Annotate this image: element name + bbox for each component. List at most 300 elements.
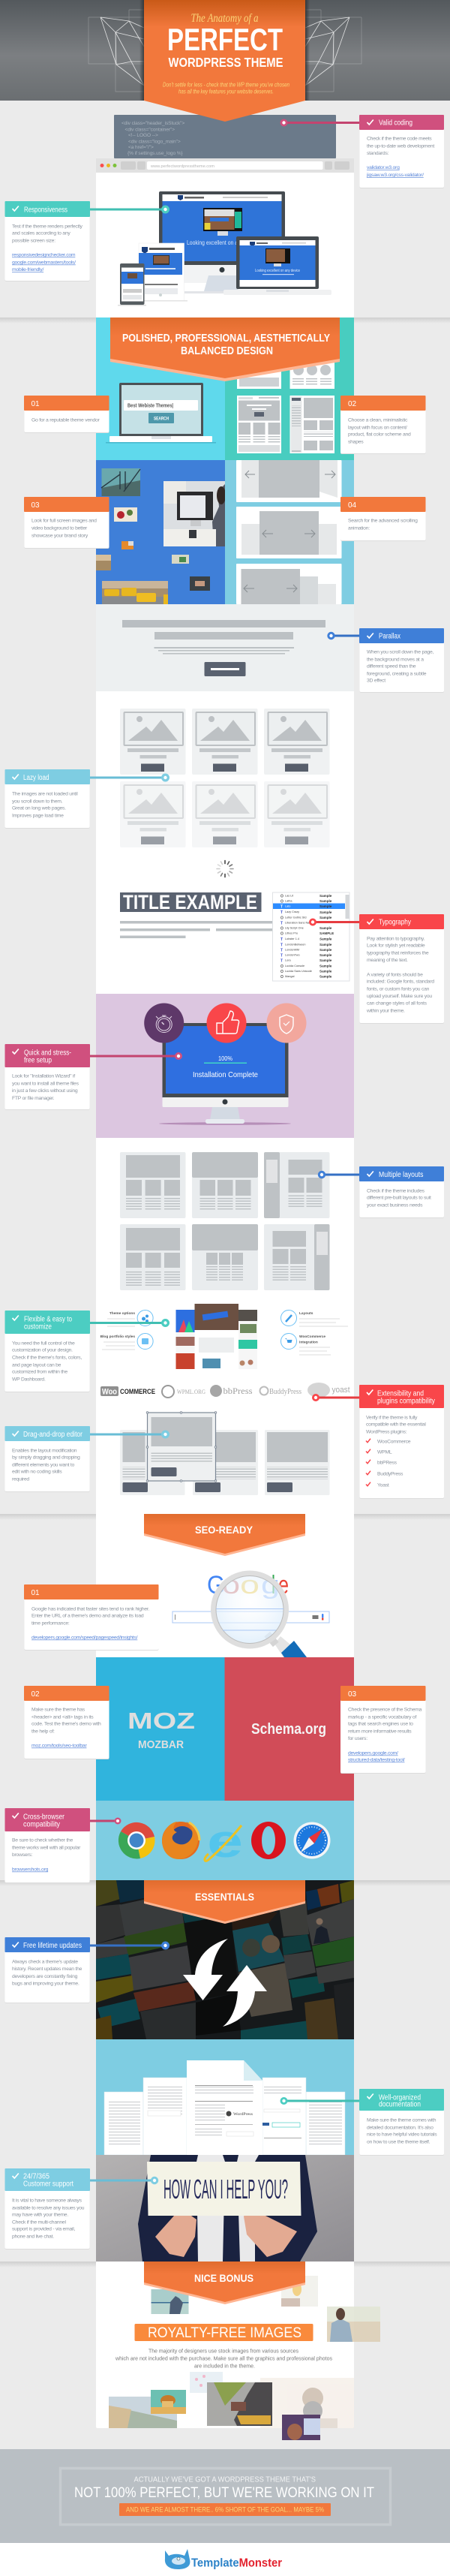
callout connector (318, 1171, 360, 1178)
callout text: A variety of fonts should be (367, 973, 423, 977)
callout header (4, 1044, 90, 1067)
laptop: Looking excellent on any device (255, 269, 300, 273)
title banner (144, 0, 305, 122)
callout header: Extensibility and (377, 1390, 424, 1398)
callout header: Well-organized (379, 2094, 421, 2102)
step card 03: 03 (32, 501, 40, 510)
callout header (359, 1166, 444, 1181)
photo: bridge (101, 468, 140, 496)
font picker list: O (280, 932, 284, 937)
wireframe card: right (265, 1430, 330, 1495)
font picker list: Liberation Sans Nar (285, 922, 310, 925)
font picker list: Latha (285, 899, 292, 902)
callout text: Verify if the theme is fully (366, 1416, 418, 1420)
icon: chrome (118, 1822, 155, 1858)
callout: typography (309, 914, 444, 1024)
seo step card 02: code. Test the theme's demo with (32, 1722, 101, 1726)
plugin checklist: WPML (377, 1450, 392, 1455)
step card 02: Choose a clean, minimalistic (348, 417, 408, 423)
font picker list: O (280, 899, 284, 904)
callout text (12, 224, 82, 272)
callout header (4, 2168, 90, 2191)
callout text: Check if the theme includes (367, 1189, 425, 1193)
photo: muffin (151, 2390, 186, 2414)
callout header (4, 769, 90, 784)
panel: documentation pages (96, 2039, 354, 2155)
callout header: Typography (379, 919, 411, 926)
step card 01: Go for a reputable theme vendor (32, 417, 100, 423)
callout header (4, 1808, 90, 1831)
callout: well-organized documentation (280, 2089, 444, 2156)
callout text: Check if the multi-channel (12, 2220, 66, 2225)
dragged card with handles (146, 1412, 217, 1482)
banner: essentials: ESSENTIALS (195, 1891, 254, 1903)
option: layouts: Layouts (299, 1311, 314, 1316)
option: woocommerce integration: WooCommerce (299, 1335, 326, 1339)
font picker list: LondonMM (285, 949, 299, 952)
font picker list: Lily Script One (285, 926, 304, 929)
panel: installation complete (96, 994, 354, 1138)
panel: code view: {% if settings.use_logo %} (128, 151, 184, 156)
option: blog portfolio styles: Blog portfolio styles (100, 1335, 135, 1339)
royalty-free heading: ROYALTY-FREE IMAGES (148, 2325, 302, 2341)
panel: mozbar: MOZ (128, 1708, 195, 1734)
seo step card 03: structured-data/testing-tool/ (348, 1758, 405, 1762)
seo step card 02: the help of: (32, 1729, 55, 1734)
help sign (147, 2162, 302, 2216)
panel: minimalist wireframes (225, 317, 354, 460)
callout: valid coding (280, 115, 444, 188)
callout connector (90, 1052, 182, 1060)
panel: vendor laptop search: Best Webiste Themes| (128, 404, 173, 408)
footer logo strip (0, 2543, 450, 2576)
footer line 1: ACTUALLY WE'VE GOT A WORDPRESS THEME THAT'S (134, 2475, 316, 2484)
icon: monster (165, 2549, 190, 2569)
callout text (12, 2198, 85, 2240)
callout header: Free lifetime updates (23, 1942, 82, 1950)
seo step card 01: time performance: (32, 1621, 70, 1626)
callout text (366, 137, 434, 178)
callout: flexible and easy to customize (4, 1311, 170, 1392)
seo step card 03 (340, 1686, 426, 1774)
option: woocommerce integration (280, 1333, 331, 1356)
step card 03: showcase your brand story (32, 533, 88, 539)
callout text: jigsaw.w3.org/css-validator/ (366, 173, 424, 178)
callout text: and page layout can be (12, 1363, 62, 1368)
callout text: phone and live chat. (12, 2234, 54, 2240)
callout text: theme works well with all popular (12, 1845, 81, 1851)
logo: wpml: WPML.ORG (177, 1388, 206, 1395)
callout text: Make sure the theme comes with (367, 2118, 436, 2123)
installation progress: 100% (218, 1055, 232, 1062)
callout header: Flexible & easy to (24, 1315, 72, 1324)
callout header: Quick and stress- (24, 1049, 71, 1057)
wireframe card: middle (193, 1430, 258, 1495)
photo: woman with laptop (282, 2415, 320, 2440)
magnifier (213, 1573, 307, 1657)
layouts grid row 2 (120, 1224, 330, 1290)
seo step card 01: 01 (32, 1589, 40, 1597)
seo step card 03: for users: (348, 1736, 368, 1741)
callout: lazy load (4, 769, 170, 829)
seo step card 01 (24, 1584, 159, 1651)
footer highlight (119, 2503, 331, 2516)
laptop (224, 236, 332, 295)
logo: wpml (162, 1386, 206, 1398)
icon: internet explorer: e (207, 1816, 243, 1867)
callout text: responsivedesignchecker.com (12, 252, 76, 258)
layout thumbnail 3 (264, 1152, 330, 1218)
search box (172, 1612, 329, 1623)
panel: code view: <div class="container"> (124, 128, 175, 132)
callout header (359, 115, 444, 130)
photo: small thumbnails (96, 541, 210, 591)
font picker list: LondonBetween (285, 943, 305, 946)
bonus paragraph (115, 2348, 332, 2369)
callout text: within your theme. (366, 1009, 405, 1013)
desktop monitor: Looking excellent on a (187, 239, 238, 246)
callout text (12, 1341, 82, 1383)
font picker list: Sample (320, 970, 332, 973)
callout text: by simply dragging and dropping (12, 1455, 80, 1461)
callout connector (90, 773, 170, 782)
google wordmark: o (222, 1571, 240, 1599)
panel: schema.org: Schema.org (251, 1721, 326, 1738)
font picker list: Sample (320, 894, 332, 898)
callout text: available to resolve any issues you (12, 2205, 85, 2211)
photo: flowers (114, 507, 137, 522)
step card 04: animation: (348, 525, 370, 531)
subtitle: has all the key features your website deserves. (178, 89, 274, 95)
step card 02: product, flat color scheme and (348, 432, 411, 437)
logo: woocommerce: Woo (102, 1387, 117, 1396)
panel: mozbar: MOZBAR (138, 1738, 184, 1751)
icon: firefox (162, 1822, 200, 1859)
font picker list: LondonTwo (285, 953, 300, 956)
callout connector (90, 206, 170, 213)
bonus paragraph: which are not included with the purchase. Make sure all the graphics and professional photos (115, 2355, 332, 2361)
photo: photographer (260, 2378, 354, 2428)
photo: desk with monitor (164, 481, 226, 546)
option: woocommerce integration: integration (299, 1341, 318, 1345)
font picker list: O (280, 895, 284, 899)
drag and drop wireframes (120, 1412, 330, 1495)
callout header: compatibility (23, 1821, 60, 1828)
document page center: WordPress (233, 2112, 253, 2117)
wireframe decoration: right (305, 10, 362, 92)
callout connector (90, 1941, 170, 1950)
step card 04: Search for the advanced scrolling (348, 518, 418, 524)
typography sample title (120, 891, 273, 938)
photo: pink notes (190, 2372, 223, 2393)
installation progress: Installation Complete (193, 1070, 258, 1079)
installation progress (193, 1055, 258, 1079)
callout header (4, 201, 90, 217)
subtitle: Don't settle for less - check that the WP theme you've chosen (163, 81, 290, 89)
icon: opera (251, 1822, 286, 1859)
callout header (4, 1311, 90, 1334)
panel: code view (114, 115, 336, 158)
banner: seo-ready: SEO-READY (195, 1524, 254, 1536)
callout: parallax (327, 628, 444, 693)
step card 03 (24, 497, 110, 549)
callout text: support is provided - via email, (12, 2226, 76, 2232)
font picker list: T (280, 905, 283, 910)
logo: yoast: yoast (332, 1386, 350, 1395)
carousel wireframe 2 (236, 507, 342, 558)
callout text (366, 937, 434, 1013)
font picker list: Sample (320, 899, 332, 903)
font picker list: Sample (320, 948, 332, 952)
callout text: browsershots.org (12, 1867, 49, 1872)
document page far left (104, 2092, 143, 2155)
layout thumbnail 1 (120, 1152, 186, 1218)
callout text: different elements you want to (12, 1462, 75, 1468)
panel: essentials theme collage (96, 1880, 354, 2039)
panel: code view: <div class="logo_main"> (128, 140, 181, 144)
font picker list: O (280, 964, 284, 969)
step card 01: 01 (32, 400, 40, 408)
callout: drag and drop editor (4, 1426, 170, 1492)
font picker list: O (280, 916, 284, 920)
callout connector (90, 1818, 122, 1824)
panel: schema.org (225, 1657, 354, 1801)
document page right (262, 2078, 306, 2155)
callout header (359, 628, 444, 643)
callout text: the up-to-date web development (367, 144, 434, 149)
callout text: history. Recent updates mean the (12, 1967, 82, 1972)
callout text: detailed documentation. It's also (367, 2126, 434, 2130)
photo: woman on the beach (327, 2307, 380, 2342)
callout text: standards: (367, 151, 389, 156)
plugin checklist (366, 1439, 411, 1488)
callout header: Multiple layouts (379, 1171, 423, 1179)
google search with magnifier (172, 1571, 329, 1657)
seo step card 03: return more informative results (348, 1729, 412, 1734)
callout text (367, 2118, 437, 2145)
callout text (12, 791, 78, 818)
google wordmark: G (207, 1571, 225, 1599)
font picker list: Sample (320, 953, 332, 957)
logo: buddypress: BuddyPress (269, 1388, 302, 1396)
font picker list: SAMPLE (320, 931, 334, 935)
panel: code view: <div class="header_isStuck"> (122, 121, 184, 126)
font picker list: Letter Gothic Std (285, 916, 306, 919)
icon: internet explorer (205, 1816, 243, 1867)
font picker list: Lobster 1.4 (285, 937, 299, 940)
callout text (366, 1416, 426, 1435)
seo step card 03: developers.google.com/ (348, 1750, 398, 1756)
callout header: Lazy load (23, 774, 50, 782)
font picker list: Mangal (285, 975, 295, 978)
font picker list: T (280, 922, 283, 926)
wireframe decoration: left (88, 10, 144, 92)
google wordmark: o (240, 1571, 260, 1599)
font picker list: O (280, 970, 284, 974)
header band (0, 0, 450, 101)
logotype: TemplateMonster (191, 2556, 282, 2570)
callout text: you want to install all theme files (12, 1081, 80, 1087)
photo: man with phone (207, 2382, 272, 2426)
layout thumbnail 2 (192, 1152, 258, 1218)
callout: extensibility and plugins (312, 1385, 444, 1499)
browser toolbar: www.perfectwordpresstheme.com (150, 164, 214, 169)
title line: the anatomy: The Anatomy of a (190, 12, 258, 25)
title line: perfect: PERFECT (167, 22, 283, 57)
lazy load grid row 1 (120, 709, 330, 775)
logo: woocommerce (100, 1386, 155, 1396)
callout text: in just a few clicks without using (12, 1088, 78, 1094)
callout header (359, 2089, 444, 2111)
font picker list: Sample (320, 926, 332, 930)
logo: bbpress: bbPress (224, 1386, 253, 1396)
font picker list: T (280, 937, 283, 942)
callout text: meaning of the text. (367, 958, 408, 963)
callout header: Customer support (23, 2180, 74, 2189)
seo step card 03: tags that search engines use to (348, 1722, 413, 1726)
font picker list: Lucida Console (285, 964, 304, 968)
seo step card 01: developers.google.com/speed/pagespeed/insights/ (32, 1635, 138, 1641)
callout text: Always check a theme's update (12, 1959, 78, 1965)
panel: scrolling animation (225, 460, 354, 604)
white content column: layouts to SEO (96, 1138, 354, 1657)
browser toolbar (96, 158, 354, 173)
callout header: Responsiveness (24, 206, 68, 215)
callout text: google.com/webmasters/tools/ (12, 260, 76, 266)
callout text: 3D effect (367, 679, 386, 683)
step card 02 (340, 396, 426, 454)
google wordmark: l (272, 1571, 275, 1599)
font picker list: T (280, 943, 283, 947)
white content column (96, 691, 354, 994)
font picker list: O (280, 926, 284, 931)
icon: safari (294, 1822, 330, 1858)
callout: multiple layouts (318, 1166, 444, 1218)
font picker list: Lucida Sans Unicode (285, 970, 312, 973)
step card 02: shapes (348, 440, 364, 444)
font picker list: Las Lit (285, 895, 294, 898)
callout text: and scales according to any (12, 231, 70, 236)
callout connector (309, 919, 360, 926)
callout text (12, 1449, 80, 1482)
font picker list: T (280, 959, 283, 964)
banner: polished design: BALANCED DESIGN (181, 345, 273, 357)
callout text: bugs and improving your theme. (12, 1982, 80, 1986)
banner: polished design: POLISHED, PROFESSIONAL, AESTHETICALLY (122, 333, 330, 345)
footer message (0, 2449, 450, 2543)
step card 02: 02 (348, 400, 357, 408)
callout connector (90, 1319, 170, 1327)
callout text: fonts, or custom fonts you can (367, 986, 430, 992)
font picker list: Sample (320, 904, 332, 908)
callout text: typography that reinforces the (367, 950, 429, 956)
callout text: your exact business needs (367, 1202, 423, 1208)
font picker list: T (280, 953, 283, 958)
google wordmark: e (278, 1571, 289, 1599)
seo step card 02: moz.com/tools/seo-toolbar (32, 1743, 87, 1749)
step card 03: Look for full screen images and (32, 518, 97, 524)
google wordmark (207, 1571, 289, 1599)
callout text: foreground, creating a subtle (367, 671, 427, 677)
panel: full-screen images (96, 460, 226, 604)
callout header: plugins compatibility (377, 1398, 435, 1405)
google wordmark: g (261, 1571, 280, 1599)
panel: how can i help you photo (96, 2155, 354, 2262)
callout text: different pre-built layouts to suit (367, 1195, 431, 1201)
phone (118, 263, 146, 306)
callout text: Check if the theme code meets (367, 137, 432, 141)
icon: shield (267, 1003, 306, 1043)
layout thumbnail 6 (264, 1224, 330, 1290)
callout text: Test if the theme renders perfectly (12, 224, 82, 230)
font picker list: Sample (320, 964, 332, 968)
panel: parallax wireframe (96, 604, 354, 691)
callout text: Enables the layout modification (12, 1449, 77, 1453)
callout text: edit with no coding skills (12, 1470, 62, 1474)
typography sample title: TITLE EXAMPLE (123, 891, 257, 913)
font picker list (273, 892, 350, 981)
callout text: Improves page load time (12, 814, 64, 818)
step card 04 (340, 497, 426, 541)
callout connector (90, 1431, 170, 1438)
seo step card 02: Make sure the theme has (32, 1707, 86, 1713)
loading spinner (217, 860, 233, 877)
option: blog portfolio styles (100, 1333, 153, 1350)
callout header (4, 1426, 90, 1441)
callout text: different speed than the (367, 664, 416, 670)
callout text: You need the full control of the (12, 1341, 75, 1347)
photo: woman by the water (152, 2289, 189, 2314)
photo: taxis (102, 581, 168, 604)
callout: free lifetime updates (4, 1937, 170, 2003)
callout header: documentation (379, 2100, 421, 2109)
option: layouts (280, 1311, 348, 1327)
bonus paragraph: are included in the theme. (194, 2363, 255, 2369)
callout text: Look for stylish yet readable (367, 943, 425, 949)
callout text: may have with your theme. (12, 2213, 68, 2217)
callout text: WordPress plugins: (366, 1429, 407, 1435)
layout thumbnail 4 (120, 1224, 186, 1290)
callout text: developers are constantly fixing (12, 1974, 78, 1979)
callout: cross-browser compatibility (4, 1808, 122, 1883)
callout text: on how to use the theme itself. (367, 2139, 430, 2145)
option: theme options: Theme options (110, 1311, 135, 1316)
callout connector (90, 2177, 158, 2184)
carousel wireframe 3 (236, 564, 342, 604)
callout text: possible screen size: (12, 239, 56, 243)
icon: stopwatch (144, 1003, 184, 1043)
banner: nice bonus (144, 2262, 305, 2304)
font picker list: Sample (320, 943, 332, 946)
callout text: mobile-friendly/ (12, 267, 44, 272)
seo step card 03: markup - a specific vocabulary of (348, 1714, 416, 1720)
footer highlight: AND WE ARE ALMOST THERE.. 6% SHORT OF THE GOAL... MAYBE 5% (126, 2505, 324, 2514)
callout header: customize (24, 1323, 52, 1332)
callout text: The images are not loaded until (12, 791, 78, 797)
callout text (367, 650, 434, 683)
plugin logos (100, 1383, 350, 1398)
callout text (12, 1073, 80, 1101)
callout text: can change styles of all fonts (367, 1001, 428, 1006)
seo step card 02: 02 (32, 1690, 40, 1699)
browser mockup with responsive devices (96, 158, 354, 317)
callout header: Drag-and-drop editor (23, 1431, 83, 1439)
callout header: free setup (24, 1057, 52, 1064)
wireframe card: left (120, 1430, 184, 1495)
callout text: you scroll down to them. (12, 799, 63, 805)
callout header: Valid coding (379, 119, 412, 128)
lazy load grid row 2 (120, 781, 330, 847)
